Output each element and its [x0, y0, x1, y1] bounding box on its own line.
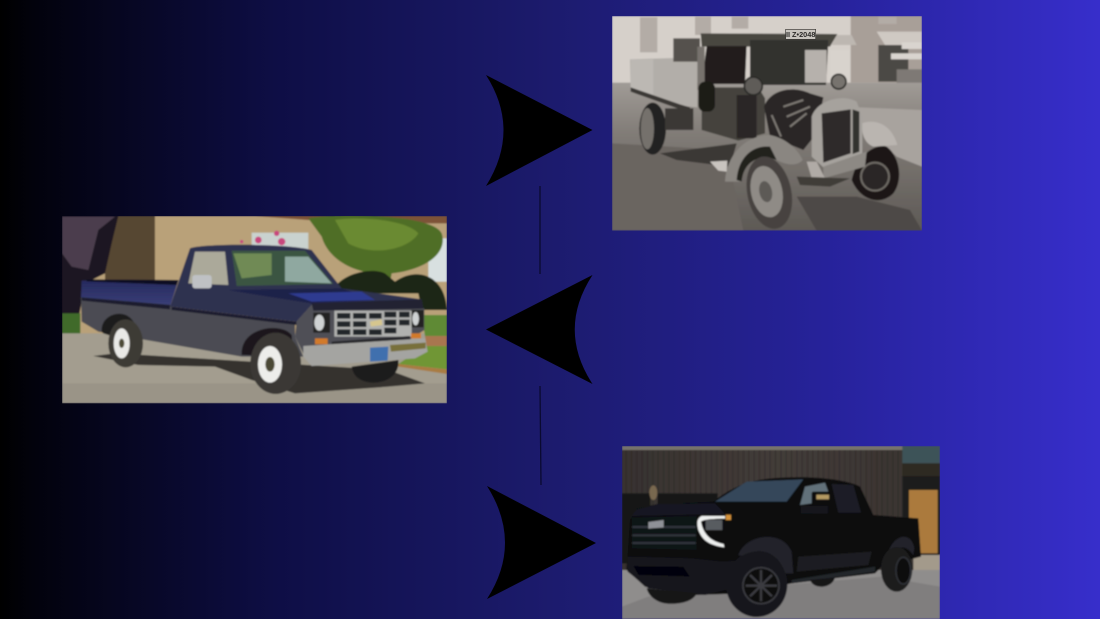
photo: 1970s Chevrolet pickup	[62, 216, 447, 403]
photo: modern Silverado HD	[622, 446, 940, 619]
connector line lower	[540, 386, 541, 485]
photo: vintage truck	[612, 16, 922, 233]
connector line upper	[539, 186, 541, 274]
arrow: to 1970s pickup	[486, 275, 592, 384]
licence plate: II Z•2048	[786, 30, 815, 39]
arrow: to modern pickup	[487, 486, 596, 599]
arrow: to vintage truck	[486, 75, 592, 186]
